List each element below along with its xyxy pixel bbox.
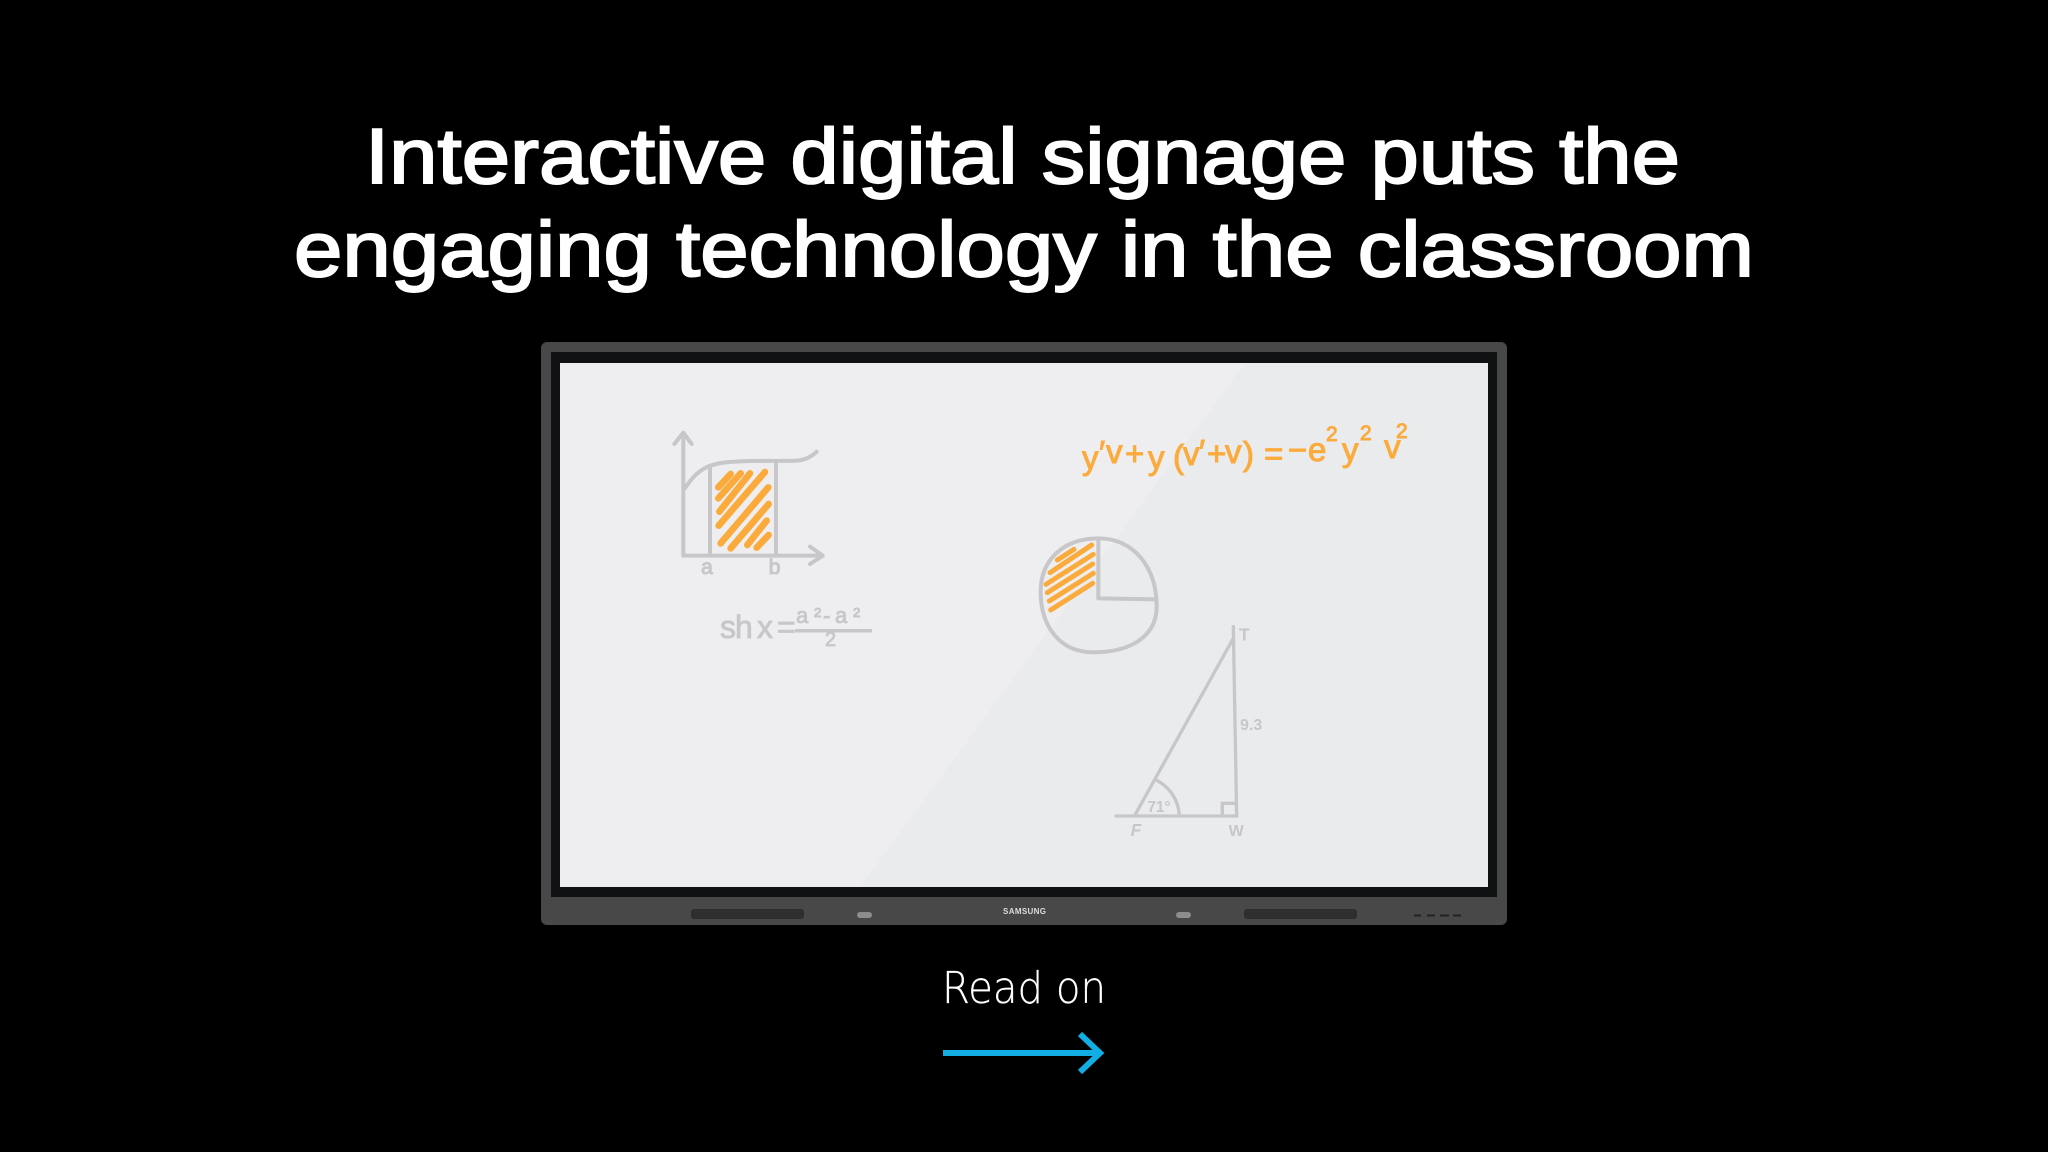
title: engaging technology in the classroom [294,205,1754,293]
title [294,112,1754,293]
triangle labels: 71° [1147,799,1171,816]
right button [1176,912,1191,918]
arrow [943,1034,1100,1072]
read on label: Read on [942,963,1106,1014]
pie hatching [1046,545,1093,610]
axis labels: a [701,555,713,579]
graph axes and curve [674,433,823,564]
title: Interactive digital signage puts the [365,112,1680,200]
axis labels: b [769,555,781,579]
sketch: right triangle [1116,625,1262,840]
triangle labels: T [1239,625,1250,645]
pie outline [1041,538,1157,652]
left button [857,912,872,918]
left speaker [691,909,804,919]
sketch: hyperbolic formula: shx= [720,609,796,645]
triangle labels [1131,625,1262,840]
handwritten orange equation: 2 [1396,420,1408,443]
right speaker [1244,909,1357,919]
interactive display monitor [541,342,1507,925]
SAMSUNG logo: SAMSUNG [1003,907,1046,916]
handwritten orange equation: y′v+y(v′+v)=−ey v [1082,428,1401,476]
whiteboard screen [560,363,1488,887]
axis labels [701,555,781,579]
triangle labels: W [1229,823,1245,840]
sketch: hyperbolic formula: 2 [825,629,836,651]
triangle lines [1116,627,1237,816]
handwritten orange equation: 2 [1326,423,1338,446]
sketch: hyperbolic formula [720,603,872,651]
black bezel [551,352,1497,897]
monitor frame [541,342,1507,925]
sketch: hyperbolic formula: a²-a² [796,603,860,628]
sketch: pie chart [1041,538,1157,652]
handwritten orange equation: 2 [1360,422,1372,445]
sketch: area under curve graph [674,433,823,579]
control dashes [1414,914,1461,916]
triangle labels: F [1131,820,1142,840]
triangle labels: 9.3 [1240,717,1262,734]
orange hatching [718,472,769,548]
